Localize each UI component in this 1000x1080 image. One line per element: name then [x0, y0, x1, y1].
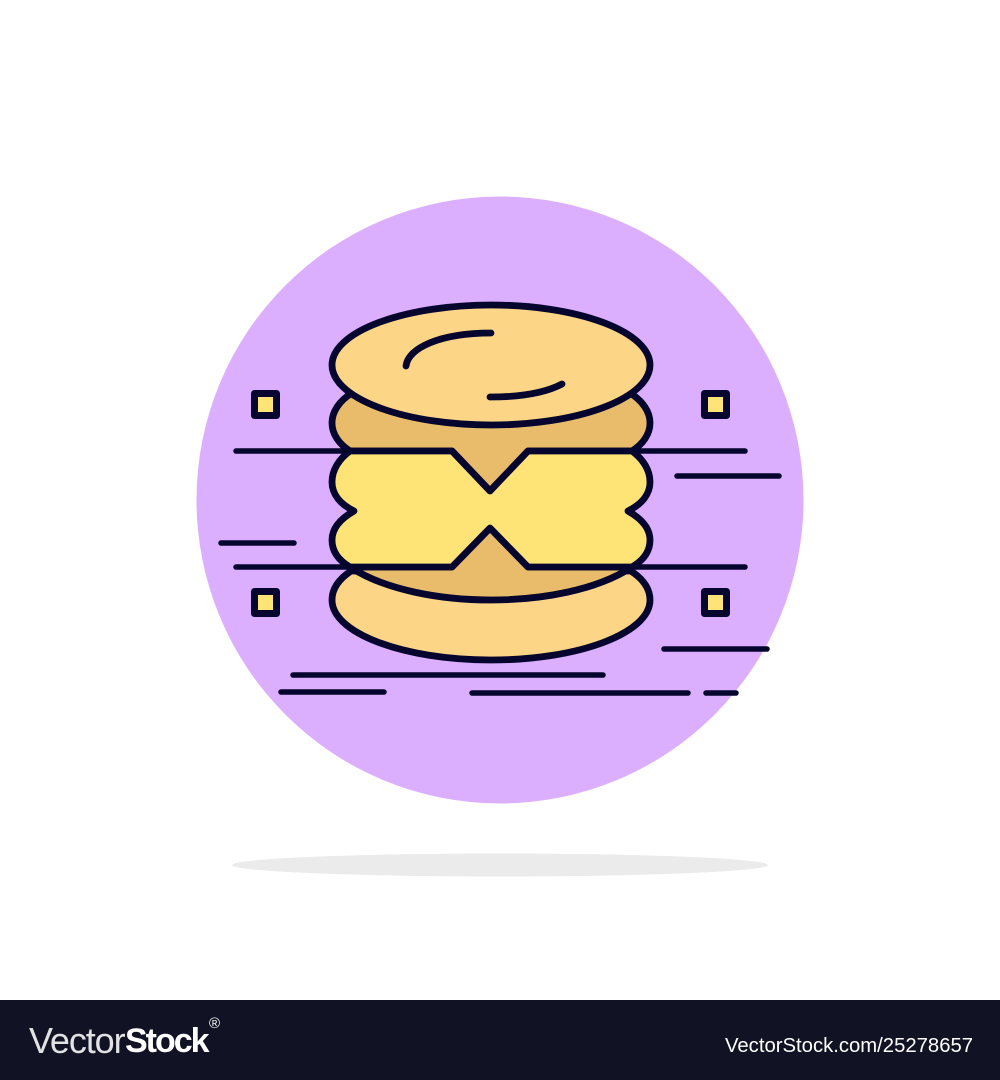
- footer bar: [0, 1000, 1000, 1080]
- marker: top right: [704, 394, 726, 416]
- upper patty: [332, 393, 650, 491]
- marker: bottom right: [704, 592, 726, 614]
- square markers: [254, 394, 726, 614]
- bun highlight: left: [406, 333, 491, 366]
- lower patty: [350, 528, 632, 600]
- logo: VectorStock: [29, 1015, 220, 1061]
- bottom bun: [332, 571, 650, 660]
- top bun: [332, 305, 650, 425]
- icon: burger: [236, 305, 745, 660]
- motion lines: [221, 476, 779, 693]
- cheese slice: [332, 451, 650, 567]
- horizontal lines behind burger: [236, 451, 745, 567]
- logo: VectorStock: Stock: [125, 1022, 208, 1060]
- logo: VectorStock: ®: [209, 1015, 220, 1032]
- marker: bottom left: [254, 592, 276, 614]
- ground shadow: [232, 854, 768, 876]
- image id: VectorStock.com/25278657: [725, 1035, 973, 1057]
- logo: VectorStock: Vector: [29, 1020, 124, 1061]
- bun highlight: right: [490, 384, 562, 397]
- marker: top left: [254, 394, 276, 416]
- background circle: [196, 196, 804, 804]
